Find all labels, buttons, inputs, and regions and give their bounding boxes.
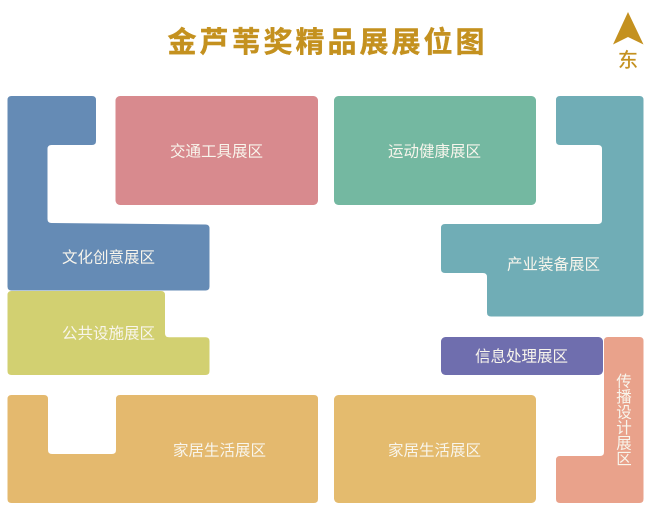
title: 金芦苇奖精品展展位图 bbox=[168, 26, 488, 59]
panel: culture and creativity zone: 文化创意展区 bbox=[62, 248, 155, 266]
panel: information processing zone: 信息处理展区 bbox=[475, 348, 568, 366]
panel: home and living zone, right bbox=[334, 395, 536, 503]
panel: culture and creativity zone bbox=[8, 96, 210, 290]
panel: transport zone bbox=[116, 96, 318, 205]
panel: home and living zone, left: 家居生活展区 bbox=[173, 442, 266, 460]
panel: sports and health zone: 运动健康展区 bbox=[388, 142, 481, 160]
panel: public facilities zone bbox=[8, 291, 210, 375]
panel: media design zone bbox=[556, 337, 644, 503]
panel: transport zone: 交通工具展区 bbox=[170, 142, 263, 160]
panel: home and living zone, right: 家居生活展区 bbox=[388, 442, 481, 460]
panel: industrial equipment zone: 产业装备展区 bbox=[507, 256, 600, 274]
panel: industrial equipment zone bbox=[441, 96, 644, 316]
panel: home and living zone, left bbox=[8, 395, 318, 503]
icon: east compass arrow: 东 bbox=[618, 49, 638, 72]
panel: media design zone: 传播设计展区 bbox=[616, 372, 632, 468]
icon: east compass arrow bbox=[613, 12, 644, 72]
panel: information processing zone bbox=[441, 337, 603, 375]
panel: sports and health zone bbox=[334, 96, 536, 205]
panel: public facilities zone: 公共设施展区 bbox=[62, 324, 155, 342]
